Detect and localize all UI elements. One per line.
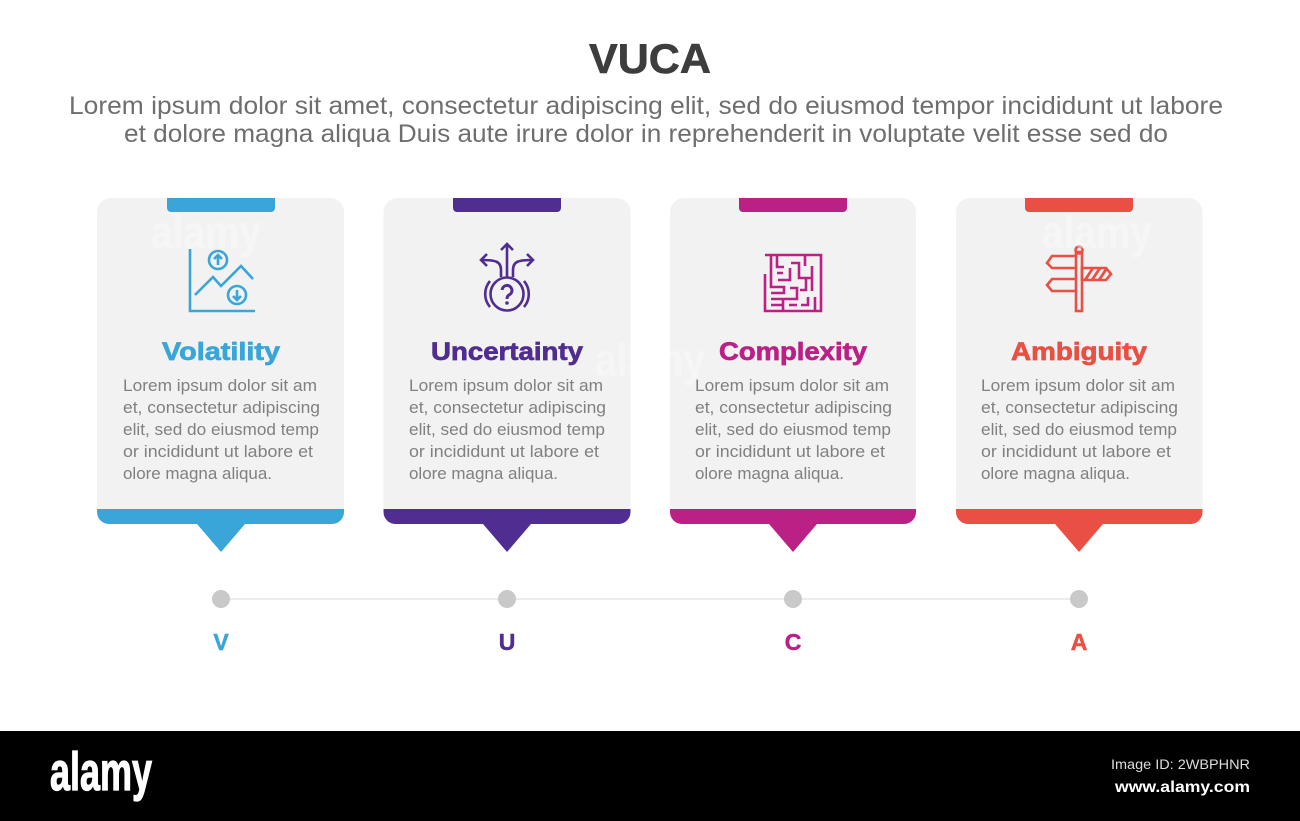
body text: or incididunt ut labore et <box>695 442 885 461</box>
body text: et, consectetur adipiscing <box>695 398 892 417</box>
body text: olore magna aliqua. <box>981 464 1130 483</box>
subtitle text: et dolore magna aliqua Duis aute irure dolor in reprehenderit in voluptate velit esse sed do <box>124 120 1168 148</box>
body text: olore magna aliqua. <box>123 464 272 483</box>
body text: elit, sed do eiusmod temp <box>981 420 1177 439</box>
pointer footer <box>384 509 630 552</box>
body text: et, consectetur adipiscing <box>981 398 1178 417</box>
watermarks: alamy <box>151 206 261 258</box>
footer image id: Image ID: 2WBPHNR <box>1111 756 1250 772</box>
panel: uncertainty <box>384 198 630 552</box>
heading: Ambiguity <box>1011 338 1147 366</box>
panel: ambiguity <box>956 198 1202 552</box>
top tab <box>453 198 561 212</box>
footer bar <box>0 731 1300 821</box>
timeline letters: U <box>499 629 515 655</box>
body text <box>981 376 1178 483</box>
watermarks: alamy <box>1042 206 1152 258</box>
top tab <box>739 198 847 212</box>
body text: or incididunt ut labore et <box>981 442 1171 461</box>
timeline letters <box>213 629 1087 655</box>
timeline letters: V <box>213 629 229 655</box>
watermarks <box>151 206 1152 386</box>
watermarks: alamy <box>595 334 705 386</box>
body text <box>409 376 606 483</box>
pointer footer <box>956 509 1202 552</box>
pointer footer <box>670 509 916 552</box>
panel: complexity <box>670 198 916 552</box>
subtitle text: Lorem ipsum dolor sit amet, consectetur adipiscing elit, sed do eiusmod tempor incididunt ut labore <box>69 92 1223 120</box>
body text: Lorem ipsum dolor sit am <box>981 376 1175 395</box>
icon: branching arrows and question <box>481 244 533 310</box>
icon: chart <box>190 249 255 311</box>
title: VUCA <box>589 35 711 82</box>
body text: elit, sed do eiusmod temp <box>695 420 891 439</box>
body text: olore magna aliqua. <box>695 464 844 483</box>
body text: elit, sed do eiusmod temp <box>409 420 605 439</box>
body text: et, consectetur adipiscing <box>123 398 320 417</box>
timeline <box>212 590 1088 608</box>
heading: Complexity <box>719 338 867 366</box>
timeline letters: A <box>1071 629 1087 655</box>
heading: Volatility <box>162 338 280 366</box>
panel: volatility <box>97 198 344 552</box>
icon: maze <box>765 255 821 311</box>
footer logo: alamy <box>50 742 152 802</box>
body text: Lorem ipsum dolor sit am <box>123 376 317 395</box>
body text: olore magna aliqua. <box>409 464 558 483</box>
subtitle text <box>69 92 1223 148</box>
body text: or incididunt ut labore et <box>409 442 599 461</box>
footer url: www.alamy.com <box>1114 779 1250 796</box>
timeline letters: C <box>785 629 801 655</box>
body text <box>695 376 892 483</box>
icon: signpost <box>1047 246 1111 311</box>
heading: Uncertainty <box>431 338 583 366</box>
pointer footer <box>97 509 344 552</box>
body text: elit, sed do eiusmod temp <box>123 420 319 439</box>
body text: et, consectetur adipiscing <box>409 398 606 417</box>
top tab <box>167 198 275 212</box>
body text <box>123 376 320 483</box>
top tab <box>1025 198 1133 212</box>
body text: Lorem ipsum dolor sit am <box>409 376 603 395</box>
body text: or incididunt ut labore et <box>123 442 313 461</box>
body text: Lorem ipsum dolor sit am <box>695 376 889 395</box>
